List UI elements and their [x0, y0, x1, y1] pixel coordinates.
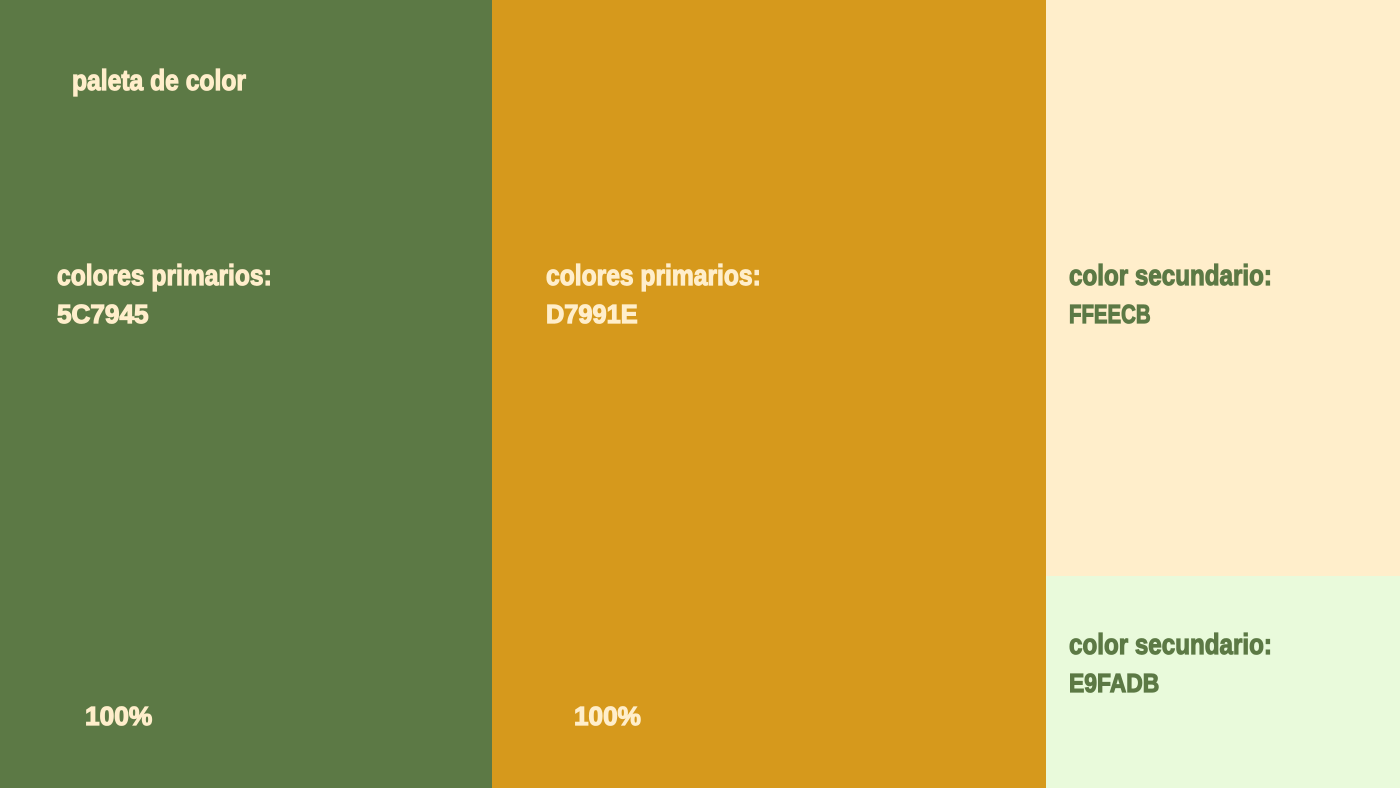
cream colour label: FFEECB [1069, 299, 1151, 329]
green colour label [57, 260, 272, 329]
cream colour label: color secundario: [1069, 260, 1272, 292]
amber colour label [546, 260, 761, 329]
amber colour label: D7991E [546, 299, 638, 329]
green colour label: 5C7945 [57, 299, 149, 329]
mint colour label: E9FADB [1069, 668, 1159, 698]
panel: green primary [0, 0, 492, 788]
panel: mint secondary [1046, 576, 1400, 788]
panel: amber primary [492, 0, 1046, 788]
amber colour label: colores primarios: [546, 260, 761, 292]
mint colour label: color secundario: [1069, 629, 1272, 661]
title: paleta de color [72, 65, 246, 97]
mint colour label [1069, 629, 1272, 698]
cream colour label [1069, 260, 1272, 329]
green percentage: 100% [85, 701, 152, 731]
panel: cream secondary [1046, 0, 1400, 576]
green colour label: colores primarios: [57, 260, 272, 292]
amber percentage: 100% [574, 701, 641, 731]
